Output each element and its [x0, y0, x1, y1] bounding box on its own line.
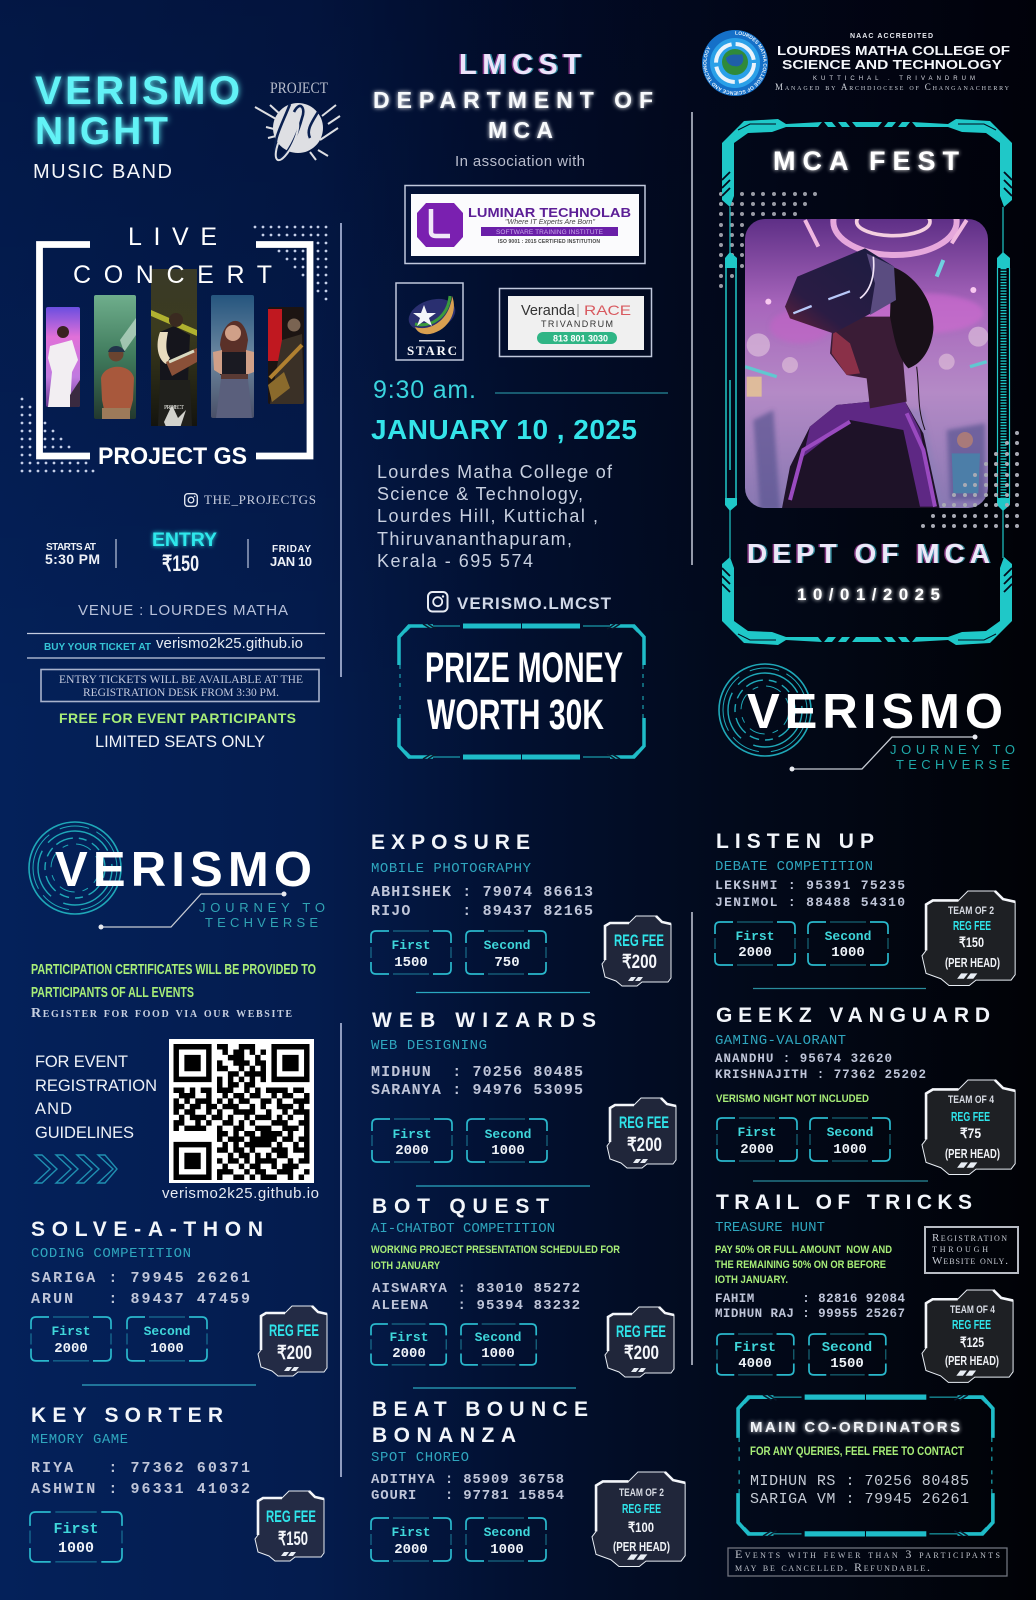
- reg fee: [607, 1098, 676, 1168]
- photo: keyboard player: [151, 269, 197, 436]
- contacts: ANANDHU : 95674 32620: [715, 1052, 892, 1066]
- association label: In association with: [455, 153, 585, 170]
- reg fee: (PER HEAD): [613, 1539, 670, 1554]
- registration box: Registration: [932, 1232, 1007, 1244]
- heading: lmcst glitch: LMCST: [458, 49, 580, 81]
- prizes: Second: [827, 1125, 873, 1140]
- contacts: SARANYA : 94976 53095: [371, 1082, 583, 1099]
- contacts: ABHISHEK : 79074 86613: [371, 884, 593, 901]
- college name: LOURDES MATHA COLLEGE OF: [777, 43, 1010, 58]
- ticket link: verismo2k25.github.io: [156, 635, 303, 652]
- prizes: [371, 1324, 536, 1365]
- certificate notice: PARTICIPATION CERTIFICATES WILL BE PROVIDED TO: [31, 961, 316, 978]
- dots bottom right: [921, 431, 1019, 528]
- prizes: 2000: [392, 1346, 426, 1362]
- qr code: [169, 1039, 314, 1183]
- concert photo strip: [46, 269, 304, 436]
- reg fee: ₹150: [959, 934, 984, 950]
- sponsor: starc: [396, 283, 463, 360]
- logo: verismo left: TECHVERSE: [205, 915, 318, 930]
- sponsor: luminar technolab: LUMINAR TECHNOLAB: [468, 205, 631, 220]
- decorative dot pattern bottom left: [21, 398, 94, 472]
- certificate notice: Register for food via our website: [31, 1006, 292, 1021]
- contacts: MIDHUN RS : 70256 80485: [750, 1473, 969, 1490]
- title: SOLVE-A-THON: [31, 1218, 263, 1241]
- prizes: First: [51, 1324, 91, 1339]
- instagram handle: THE_PROJECTGS: [204, 492, 316, 507]
- reg fee: REG FEE: [622, 1501, 661, 1516]
- reg fee: [922, 1290, 1013, 1382]
- heading: lmcst glitch: LMCST: [459, 49, 581, 81]
- address: Lourdes Matha College of: [377, 462, 613, 482]
- prizes: 1500: [394, 955, 428, 971]
- reg fee: [258, 1306, 327, 1376]
- prizes: 2000: [394, 1542, 428, 1558]
- reg fee: (PER HEAD): [945, 1146, 1000, 1161]
- entry price: ₹150: [162, 551, 199, 576]
- title: EXPOSURE: [371, 831, 530, 854]
- callout: prize money: WORTH 30K: [427, 691, 604, 739]
- contacts: ADITHYA : 85909 36758: [371, 1472, 564, 1488]
- prizes: 2000: [740, 1142, 774, 1158]
- prizes: 1000: [150, 1341, 184, 1357]
- photo: singer white outfit: [46, 307, 80, 407]
- note: IOTH JANUARY: [371, 1260, 441, 1272]
- entry notice box: [41, 670, 319, 702]
- title: KEY SORTER: [31, 1404, 223, 1427]
- prizes: First: [734, 1340, 776, 1356]
- category: GAMING-VALORANT: [715, 1033, 846, 1049]
- icon: chevrons: [35, 1155, 117, 1183]
- background lights and crowd: [745, 188, 988, 510]
- contacts: ASHWIN : 96331 41032: [31, 1481, 250, 1498]
- heading: MAIN CO-ORDINATORS: [750, 1419, 960, 1436]
- instagram: verismo.lmcst: VERISMO.LMCST: [457, 594, 612, 613]
- time: 9:30 am.: [373, 376, 476, 404]
- event: listen up: [715, 830, 1015, 986]
- event: solve-a-thon: [31, 1218, 327, 1376]
- heading: verismo night: NIGHT: [35, 110, 168, 153]
- prizes: [717, 1118, 890, 1161]
- prizes: 1000: [491, 1143, 525, 1159]
- contacts: [715, 1052, 926, 1082]
- category: DEBATE COMPETITION: [715, 859, 873, 875]
- registration call to action: REGISTRATION: [35, 1077, 157, 1095]
- contacts: [371, 1472, 564, 1504]
- reg fee: [605, 1307, 674, 1377]
- sponsor: veranda race: 813 801 3030: [553, 334, 608, 344]
- subheading: music band: MUSIC BAND: [33, 161, 172, 183]
- address: Kerala - 695 574: [377, 551, 533, 571]
- category: WEB DESIGNING: [371, 1038, 487, 1054]
- reg fee: ₹150: [278, 1529, 308, 1550]
- contacts: SARIGA VM : 79945 26261: [750, 1491, 969, 1508]
- prizes: First: [735, 929, 775, 944]
- address: Science & Technology,: [377, 484, 583, 504]
- note: PAY 50% OR FULL AMOUNT NOW AND: [715, 1244, 892, 1256]
- contacts: MIDHUN RAJ : 99955 25267: [715, 1307, 905, 1321]
- prizes: 2000: [395, 1143, 429, 1159]
- event: exposure: [371, 831, 671, 986]
- logo: verismo right: TECHVERSE: [896, 757, 1010, 772]
- registration box: Website only.: [932, 1255, 1008, 1267]
- heading: verismo night: VERISMO: [35, 69, 240, 113]
- contacts: JENIMOL : 88488 54310: [715, 895, 905, 910]
- logo: verismo left: [29, 822, 325, 930]
- reg fee: REG FEE: [951, 1109, 990, 1124]
- contacts: [750, 1473, 969, 1508]
- prizes: 1500: [830, 1356, 864, 1372]
- event info: start time: 5:30 PM: [45, 551, 100, 567]
- dividers: [116, 539, 248, 568]
- dots top left: [719, 192, 817, 288]
- panel: department: [371, 49, 668, 759]
- photo: keyboard player: PROJECT: [164, 405, 184, 411]
- registration call to action: AND: [35, 1100, 72, 1118]
- contacts: MIDHUN : 70256 80485: [371, 1064, 583, 1081]
- note: IOTH JANUARY.: [715, 1274, 788, 1286]
- reg fee: ₹75: [960, 1125, 981, 1141]
- title: BONANZA: [372, 1424, 516, 1447]
- college name: Managed by Archdiocese of Changanacherry: [775, 82, 1010, 92]
- registration call to action: [35, 1053, 157, 1142]
- prizes: Second: [144, 1324, 190, 1339]
- prizes: Second: [825, 929, 871, 944]
- prizes: 2000: [738, 945, 772, 961]
- contacts: KRISHNAJITH : 77362 25202: [715, 1068, 926, 1082]
- photo: female singer: [211, 295, 254, 418]
- callout: prize money: PRIZE MONEY: [425, 644, 623, 692]
- logo: verismo right: VERISMO: [747, 685, 1003, 739]
- sponsor: veranda race: TRIVANDRUM: [541, 319, 613, 329]
- prizes: 2000: [54, 1341, 88, 1357]
- college name: SCIENCE AND TECHNOLOGY: [782, 57, 1002, 72]
- registration box: [925, 1227, 1018, 1273]
- prizes: First: [737, 1125, 777, 1140]
- college name: [775, 33, 1010, 92]
- reg fee: TEAM OF 2: [619, 1487, 664, 1499]
- heading: department of mca: [373, 87, 653, 143]
- registration call to action: GUIDELINES: [35, 1124, 134, 1142]
- reg fee: ₹200: [624, 1343, 659, 1364]
- prizes: First: [391, 938, 431, 953]
- reg fee: TEAM OF 4: [950, 1304, 996, 1316]
- prizes: 1000: [490, 1542, 524, 1558]
- event info: start time: [45, 542, 100, 567]
- sponsor: veranda race: Veranda: [521, 302, 576, 319]
- prizes: First: [391, 1525, 431, 1540]
- heading: mca fest: MCA FEST: [773, 146, 960, 176]
- panel: mca fest: [719, 119, 1019, 645]
- note: VERISMO NIGHT NOT INCLUDED: [716, 1093, 869, 1105]
- registration box: through: [932, 1243, 988, 1255]
- prizes: 1000: [833, 1142, 867, 1158]
- contacts: RIJO : 89437 82165: [371, 903, 593, 920]
- reg fee: REG FEE: [952, 1317, 991, 1332]
- heading: live concert: [73, 223, 272, 289]
- event: trail of tricks: [715, 1191, 1018, 1382]
- title: BOT QUEST: [372, 1195, 549, 1218]
- heading: dept of mca glitch: DEPT OF MCA: [747, 538, 990, 569]
- prizes: First: [392, 1127, 432, 1142]
- reg fee: ₹100: [628, 1519, 654, 1535]
- logo: project gs: PROJECT: [270, 80, 328, 97]
- heading: verismo night: [35, 69, 240, 153]
- sponsor: veranda race: RACE: [584, 302, 631, 318]
- neon frame: [722, 119, 1012, 645]
- contacts: LEKSHMI : 95391 75235: [715, 878, 905, 893]
- category: AI-CHATBOT COMPETITION: [371, 1221, 555, 1237]
- callout: prize money: [399, 624, 644, 759]
- category: MOBILE PHOTOGRAPHY: [371, 861, 532, 877]
- contacts: RIYA : 77362 60371: [31, 1460, 250, 1477]
- heading: department of mca: DEPARTMENT OF: [373, 87, 653, 113]
- reg fee: REG FEE: [269, 1321, 319, 1340]
- prizes: [371, 1518, 546, 1561]
- event: bot quest: [371, 1195, 674, 1377]
- panel: main coordinators: [738, 1395, 993, 1536]
- prizes: 1000: [831, 945, 865, 961]
- venue: VENUE : LOURDES MATHA: [78, 602, 288, 619]
- prizes: 1000: [481, 1346, 515, 1362]
- title: [372, 1398, 588, 1447]
- prizes: 1000: [58, 1540, 94, 1557]
- contacts: SARIGA : 79945 26261: [31, 1270, 250, 1287]
- reg fee: ₹200: [622, 952, 657, 973]
- certificate notice: [31, 961, 316, 1021]
- contacts: [31, 1270, 250, 1308]
- prizes: [30, 1512, 122, 1562]
- prizes: Second: [484, 938, 530, 953]
- entry price: ENTRY: [152, 529, 217, 551]
- prizes: [31, 1317, 207, 1361]
- sponsor: luminar technolab: SOFTWARE TRAINING INSTITUTE: [496, 229, 604, 236]
- title: WEB WIZARDS: [372, 1009, 596, 1032]
- category: MEMORY GAME: [31, 1432, 128, 1448]
- logo: project gs: [255, 80, 340, 163]
- heading: dept of mca glitch: DEPT OF MCA: [748, 538, 992, 569]
- prizes: [372, 1119, 547, 1162]
- entry notice box: ENTRY TICKETS WILL BE AVAILABLE AT THE: [59, 674, 303, 686]
- sponsor: starc: STARC: [407, 343, 457, 358]
- sponsor: luminar technolab: ISO 9001 : 2015 CERTIFIED INSTITUTION: [498, 239, 600, 245]
- title: LISTEN UP: [716, 830, 874, 853]
- college name: KUTTICHAL . TRIVANDRUM: [813, 76, 975, 82]
- contacts: ALEENA : 95394 83232: [372, 1298, 580, 1314]
- reg fee: TEAM OF 4: [948, 1094, 995, 1106]
- reg fee: TEAM OF 2: [948, 905, 994, 917]
- reg fee: (PER HEAD): [945, 1353, 999, 1368]
- contacts: ARUN : 89437 47459: [31, 1291, 250, 1308]
- reg fee: REG FEE: [953, 918, 991, 933]
- illustration: vr headset person: [745, 188, 988, 510]
- logo: verismo right: JOURNEY TO: [890, 742, 1015, 757]
- reg fee: [602, 916, 671, 986]
- reg fee: ₹200: [627, 1135, 662, 1156]
- college logo: LOURDES MATHA COLLEGE OF SCIENCE AND TECHNOLOGY: [703, 31, 767, 95]
- ticket link: BUY YOUR TICKET AT: [44, 641, 152, 653]
- contacts: [371, 1064, 583, 1099]
- sponsor: veranda race: [500, 288, 652, 356]
- event date: JAN 10: [270, 554, 312, 569]
- photo: guitarist: [268, 307, 304, 404]
- heading: live concert: CONCERT: [73, 261, 272, 289]
- category: SPOT CHOREO: [371, 1450, 469, 1466]
- decorative dot pattern top right: [254, 226, 327, 300]
- person: [782, 248, 940, 510]
- heading: lmcst glitch: LMCST: [460, 49, 583, 81]
- note: THE REMAINING 50% ON OR BEFORE: [715, 1259, 886, 1271]
- entry price: [152, 529, 217, 576]
- title: BEAT BOUNCE: [372, 1398, 588, 1421]
- sponsor: luminar technolab: "Where IT Experts Are Born": [505, 219, 596, 226]
- reg fee: REG FEE: [619, 1113, 669, 1132]
- category: TREASURE HUNT: [715, 1220, 825, 1236]
- note: [371, 1244, 620, 1272]
- prizes: [715, 922, 888, 965]
- heading: dept of mca glitch: DEPT OF MCA: [746, 538, 988, 569]
- prizes: Second: [485, 1127, 531, 1142]
- event: key sorter: [30, 1404, 324, 1562]
- contacts: [715, 878, 905, 910]
- website url: verismo2k25.github.io: [162, 1185, 319, 1202]
- panel: college header: [702, 30, 1010, 96]
- ticket link: [27, 634, 325, 658]
- college name: NAAC ACCREDITED: [850, 33, 933, 40]
- subheading: FOR ANY QUERIES, FEEL FREE TO CONTACT: [750, 1444, 965, 1458]
- event date: 10/01/2025: [797, 585, 940, 604]
- prizes: Second: [822, 1340, 872, 1356]
- reg fee: [922, 1080, 1015, 1174]
- address: [377, 462, 613, 571]
- reg fee: [592, 1472, 685, 1566]
- prizes: Second: [484, 1525, 530, 1540]
- logo: verismo left: JOURNEY TO: [199, 900, 325, 915]
- limited seats: LIMITED SEATS ONLY: [95, 733, 265, 751]
- contacts: GOURI : 97781 15854: [371, 1488, 564, 1504]
- prizes: [371, 931, 546, 974]
- reg fee: (PER HEAD): [945, 955, 1000, 970]
- event date: [270, 544, 312, 569]
- frame bracket: [40, 244, 310, 456]
- contacts: [31, 1460, 250, 1498]
- contacts: [715, 1292, 905, 1321]
- prizes: 4000: [738, 1356, 772, 1372]
- logo: verismo right: [719, 664, 1015, 772]
- photo: singer red shirt: [94, 295, 136, 419]
- footnote box: may be cancelled. Refundable.: [735, 1560, 930, 1574]
- sponsor: luminar technolab: [405, 186, 645, 264]
- band name: PROJECT GS: [98, 443, 247, 470]
- column separators: [341, 112, 692, 1477]
- logo: verismo left: VERISMO: [55, 843, 312, 897]
- reg fee: [255, 1491, 324, 1561]
- reg fee: ₹200: [277, 1343, 312, 1364]
- certificate notice: PARTICIPANTS OF ALL EVENTS: [31, 984, 194, 1001]
- prizes: First: [389, 1330, 429, 1345]
- registration call to action: FOR EVENT: [35, 1053, 128, 1071]
- reg fee: REG FEE: [616, 1322, 666, 1341]
- note: WORKING PROJECT PRESENTATION SCHEDULED FOR: [371, 1244, 620, 1256]
- event: beat bounce bonanza: [371, 1398, 685, 1566]
- event date: FRIDAY: [272, 544, 311, 555]
- date: JANUARY 10 , 2025: [371, 414, 637, 445]
- contacts: FAHIM : 82816 92084: [715, 1292, 905, 1306]
- prizes: First: [53, 1521, 99, 1538]
- event: geekz vanguard: [715, 1004, 1015, 1174]
- heading: department of mca: MCA: [488, 117, 553, 143]
- footnote box: [728, 1547, 1007, 1576]
- heading: live concert: LIVE: [128, 223, 217, 251]
- prizes: Second: [475, 1330, 521, 1345]
- event: web wizards: [371, 1009, 676, 1168]
- category: CODING COMPETITION: [31, 1246, 191, 1262]
- event info: start time: STARTS AT: [46, 542, 96, 553]
- free for participants: FREE FOR EVENT PARTICIPANTS: [59, 710, 296, 726]
- address: Thiruvananthapuram,: [377, 529, 572, 549]
- contacts: [371, 884, 593, 920]
- prizes: 750: [494, 955, 520, 971]
- note: [715, 1244, 892, 1286]
- footnote box: Events with fewer than 3 participants: [735, 1547, 1000, 1561]
- contacts: [372, 1281, 580, 1314]
- contacts: AISWARYA : 83010 85272: [372, 1281, 580, 1297]
- reg fee: ₹125: [960, 1334, 984, 1350]
- panel: verismo night: [21, 69, 340, 751]
- address: Lourdes Hill, Kuttichal ,: [377, 506, 598, 526]
- reg fee: REG FEE: [266, 1507, 316, 1526]
- reg fee: [922, 891, 1015, 986]
- title: TRAIL OF TRICKS: [716, 1191, 972, 1214]
- prizes: [717, 1334, 886, 1375]
- entry notice box: REGISTRATION DESK FROM 3:30 PM.: [83, 687, 279, 699]
- reg fee: REG FEE: [614, 931, 664, 950]
- title: GEEKZ VANGUARD: [716, 1004, 990, 1027]
